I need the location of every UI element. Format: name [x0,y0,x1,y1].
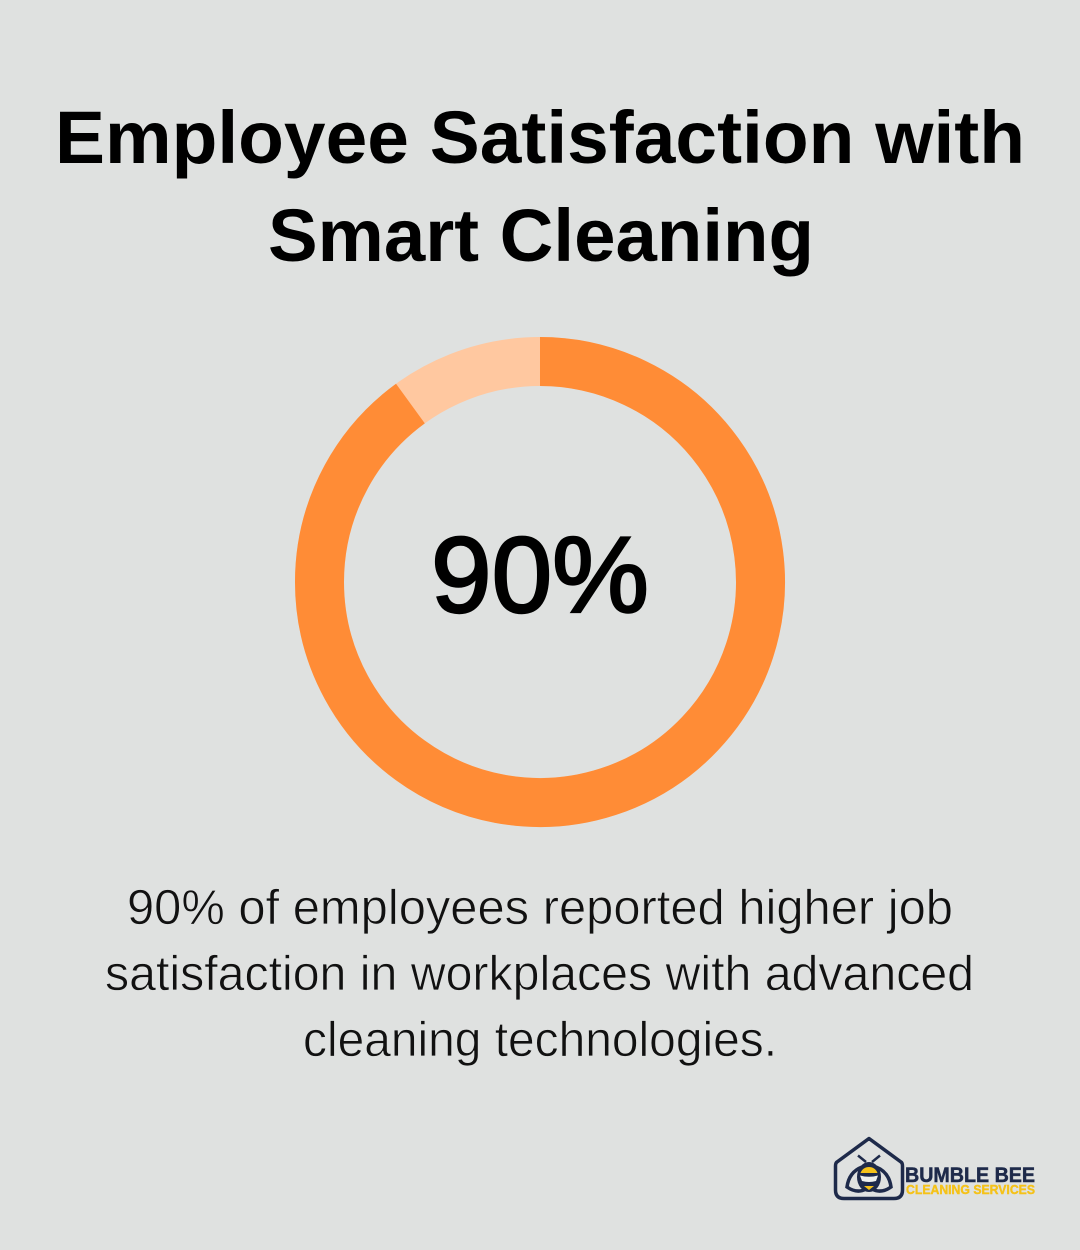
donut main segment [319,362,760,802]
description text: satisfaction in workplaces with advanced [105,947,974,1001]
logo tagline: CLEANING SERVICES [906,1183,1035,1197]
title: Smart Cleaning [268,194,814,277]
donut value: 90% [431,514,649,635]
logo: Bumble Bee Cleaning Services [836,1138,1035,1198]
logo name: BUMBLE BEE [905,1164,1035,1187]
title: Employee Satisfaction with [55,96,1025,179]
title [55,96,1025,277]
donut chart: 90% [319,362,760,802]
icon: house with bee [836,1138,902,1198]
description text [105,881,974,1067]
description text: 90% of employees reported higher job [127,881,953,935]
description text: cleaning technologies. [303,1013,777,1067]
donut remainder segment [320,362,760,802]
